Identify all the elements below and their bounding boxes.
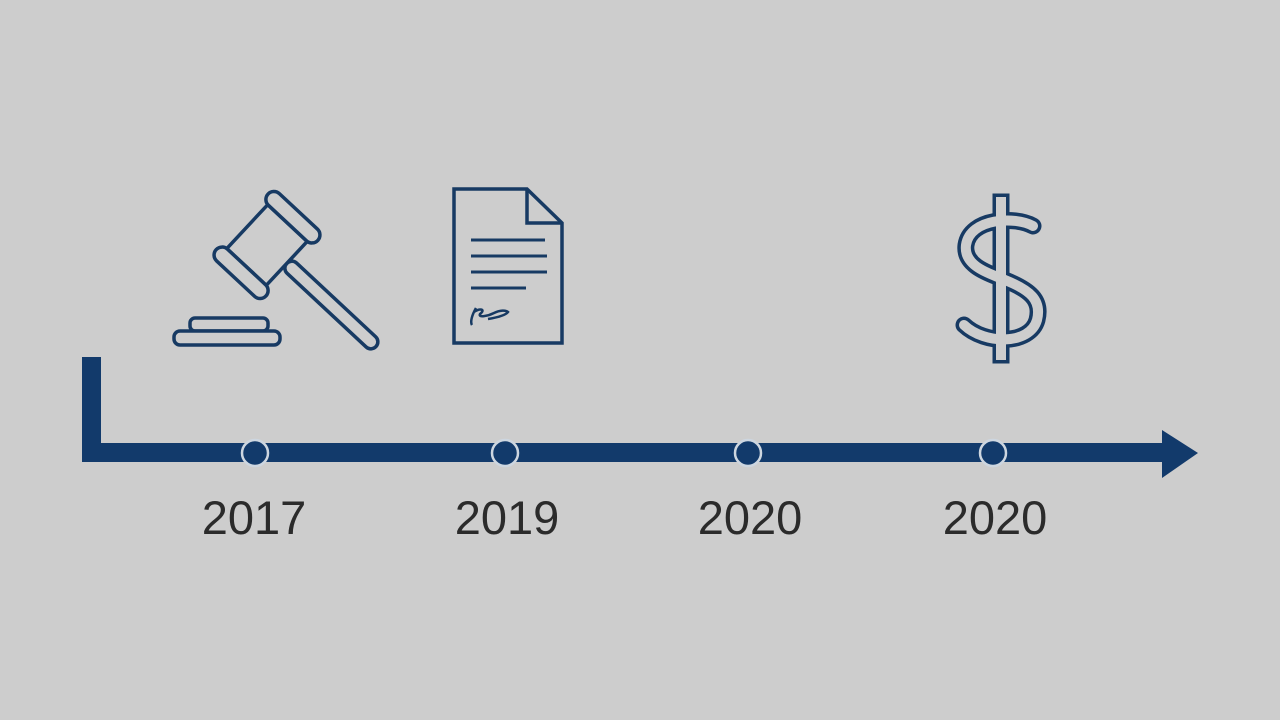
icon: dollar sign <box>964 202 1038 355</box>
timeline markers <box>242 440 1006 466</box>
icon: gavel <box>174 188 407 380</box>
label: 2020: 2020 <box>698 491 802 544</box>
label: 2017: 2017 <box>202 491 306 544</box>
label: 2019: 2019 <box>455 491 559 544</box>
label: 2020 (second): 2020 <box>943 491 1047 544</box>
timeline axis with arrow <box>82 357 1198 478</box>
icon: signed document <box>454 189 562 343</box>
